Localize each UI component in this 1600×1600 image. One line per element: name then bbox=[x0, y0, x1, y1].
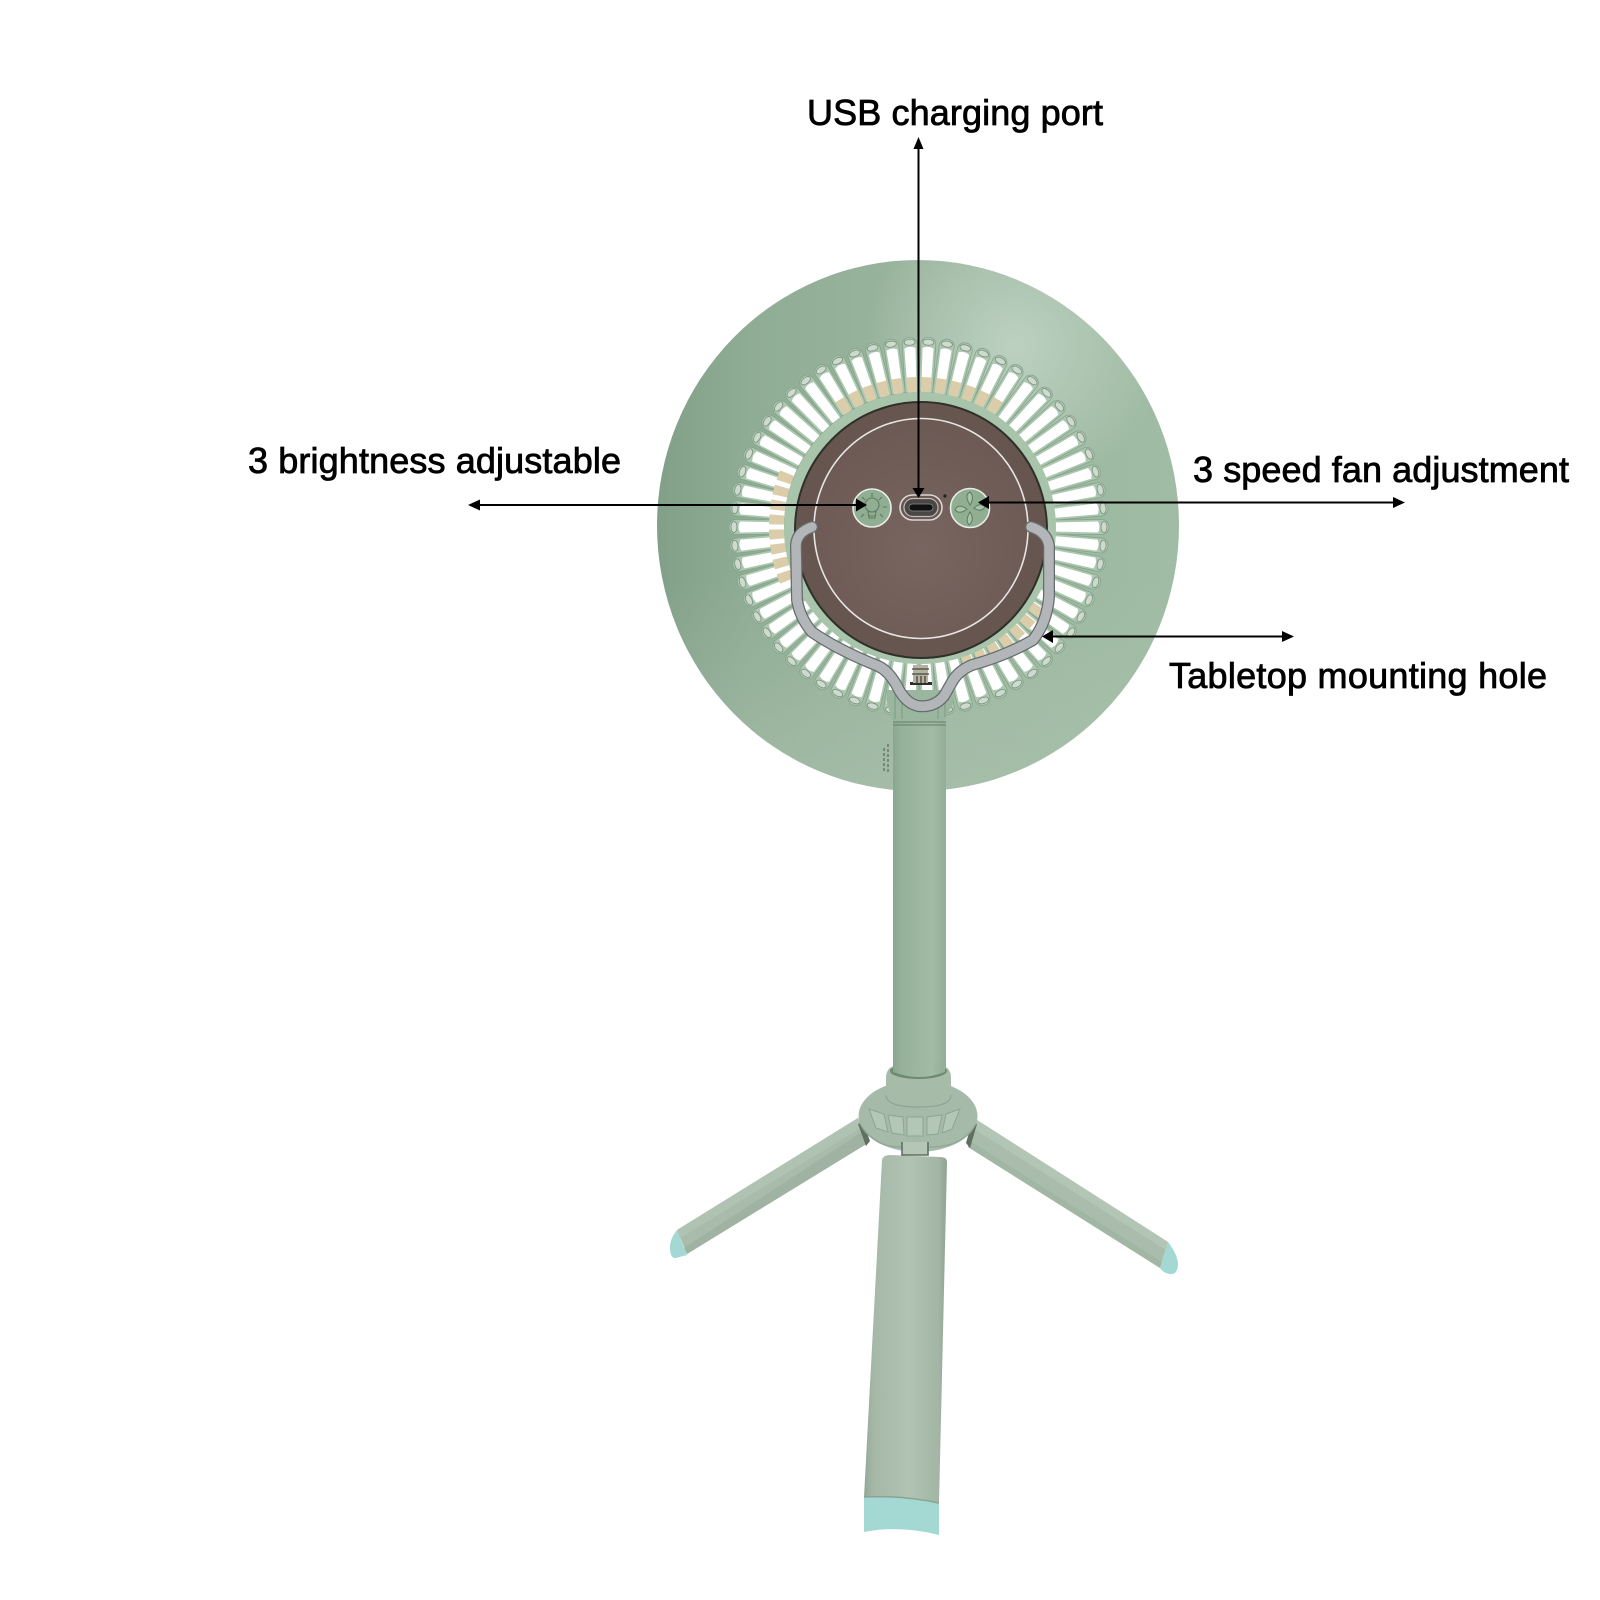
hub collar bbox=[886, 1065, 951, 1107]
button: fan speed bbox=[950, 488, 990, 528]
tripod hub bbox=[858, 1060, 978, 1155]
inner round plate bbox=[814, 418, 1028, 638]
fan grille slots bbox=[665, 329, 1155, 773]
tripod right leg bbox=[966, 1120, 1178, 1274]
arrow: brightness bbox=[468, 498, 867, 512]
arrow: USB charging port bbox=[912, 137, 924, 498]
metal wire handle bbox=[796, 527, 1049, 706]
tripod left leg bbox=[670, 1118, 870, 1258]
hub ribs bbox=[869, 1109, 960, 1136]
fan product illustration bbox=[657, 260, 1179, 1535]
label: Tabletop mounting hole: Tabletop mounting hole bbox=[1169, 655, 1547, 696]
tripod front leg bbox=[864, 1155, 947, 1535]
button: brightness bbox=[853, 489, 891, 527]
label: USB charging port: USB charging port bbox=[807, 92, 1103, 133]
mounting screw bbox=[910, 665, 932, 685]
USB-C port bbox=[900, 495, 942, 520]
tiny logo marking on disc bbox=[884, 744, 888, 774]
round fan disc bbox=[657, 260, 1179, 791]
indicator dot bbox=[943, 494, 947, 498]
label: 3 speed fan adjustment: 3 speed fan adjustment bbox=[1193, 449, 1569, 490]
main pole and neck bbox=[884, 690, 953, 1072]
brown rear housing bbox=[795, 402, 1047, 658]
green hub ring bbox=[784, 392, 1056, 664]
arrow: mounting hole bbox=[1042, 630, 1294, 643]
arrow: fan speed bbox=[978, 496, 1405, 509]
label: 3 brightness adjustable: 3 brightness adjustable bbox=[248, 440, 621, 481]
